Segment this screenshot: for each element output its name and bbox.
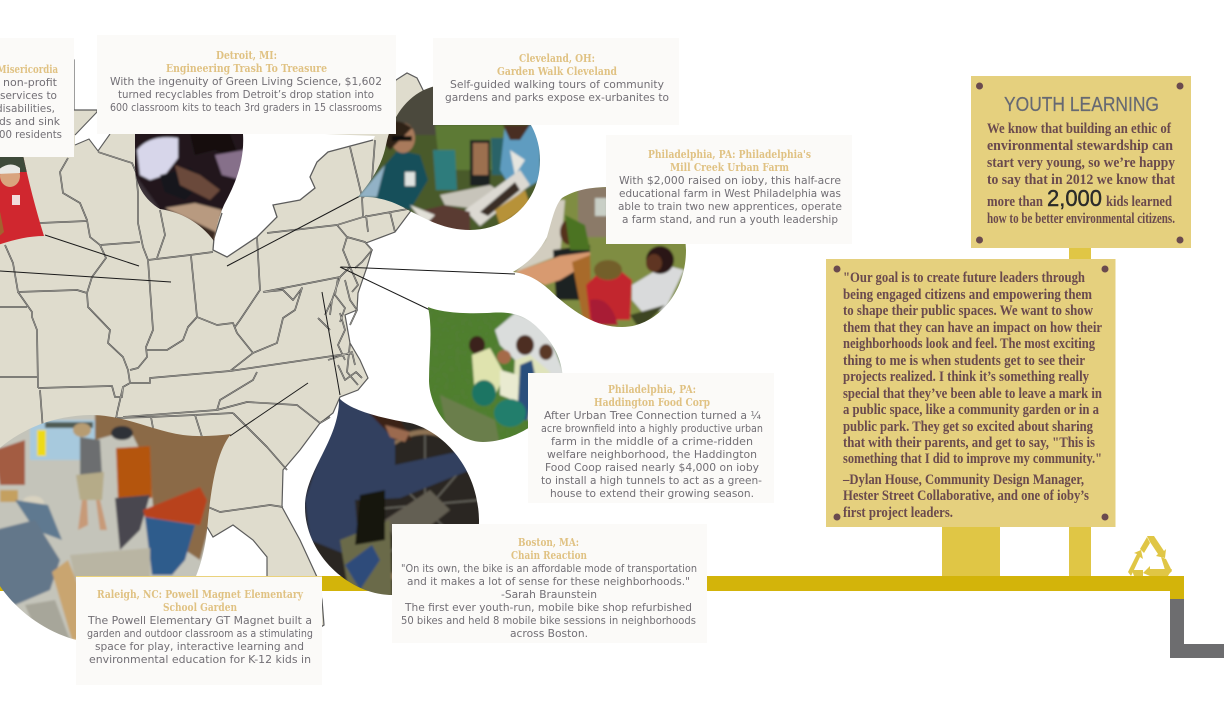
story card: Boston: 50 bikes and held 8 mobile bike sessions in neighborhoods [401,614,696,627]
icon: corner bolts [976,82,1184,244]
timeline bar: yellow and grey path [0,576,1224,658]
story card: Philadelphia Haddington: acre brownfield into a highly productive urban [541,422,763,435]
story card: Philadelphia Haddington: Food Coop raised nearly $4,000 on ioby [545,461,759,474]
story card: Boston: The first ever youth-run, mobile bike shop refurbished [404,601,692,614]
story card: Cleveland: Cleveland, OH: [519,52,595,65]
story card: Philadelphia Haddington: house to extend their growing season. [550,487,754,500]
text: quote: a public space, like a community garden or in a [843,402,1099,418]
text: attribution [842,472,1089,521]
text: quote: something that I did to improve my community." [843,451,1102,467]
panel: youth learning sign [971,76,1191,248]
text: quote: special that they’ve been able to leave a mark in [843,386,1103,402]
map of eastern United States [0,60,440,640]
story card: Boston: across Boston. [510,627,588,640]
story card: Cleveland [433,38,679,125]
story card: Boston: Chain Reaction [511,549,587,562]
story card: Misericordia: ds and sink [0,115,61,128]
photo: Cleveland garden walk [358,86,540,230]
story card: Detroit: 600 classroom kits to teach 3rd graders in 15 classrooms [110,101,382,114]
story card: Raleigh: The Powell Elementary GT Magnet built a [87,614,312,627]
story card: Philadelphia Mill Creek: educational farm in West Philadelphia was [619,187,841,200]
text: quote: projects realized. I think it’s something really [843,369,1089,385]
icon: corner bolts [834,266,1108,520]
story card: Boston [392,524,707,643]
text: quote [843,270,1103,467]
text: youth learning summary: more than [987,194,1044,210]
text: youth learning summary: to say that in 2012 we know that [987,172,1175,188]
story card: Philadelphia Mill Creek: Philadelphia, PA: Philadelphia's [648,148,811,161]
text: attribution: –Dylan House, Community Design Manager, [842,472,1084,488]
text: quote: them that they can have an impact on how their [843,320,1102,336]
photo: Boston Chain Reaction bike shop [305,398,479,595]
photo: Detroit recycled materials [135,134,244,241]
story card: Philadelphia Mill Creek: With $2,000 raised on ioby, this half-acre [619,174,841,187]
story card: Philadelphia Mill Creek: Mill Creek Urban Farm [670,161,789,174]
story card: Raleigh: space for play, interactive learning and [95,640,304,653]
text: youth learning summary [987,121,1175,227]
story card: Detroit: With the ingenuity of Green Living Science, $1,602 [110,75,382,88]
story card: Philadelphia Haddington: farm in the middle of a crime-ridden [551,435,753,448]
story card: Philadelphia Haddington: welfare neighborhood, the Haddington [547,448,757,461]
text: attribution: first project leaders. [843,505,953,521]
story card: Misericordia: non-profit [3,76,58,89]
story card: Raleigh: environmental education for K-12 kids in [89,653,311,666]
story card: Cleveland: Garden Walk Cleveland [497,65,617,78]
story card: Philadelphia Haddington: After Urban Tree Connection turned a ¼ [544,409,761,422]
story card: Boston: and it makes a lot of sense for these neighborhoods." [407,575,690,588]
heading: youth learning: YOUTH LEARNING [1004,94,1159,116]
story card: Boston: "On its own, the bike is an affordable mode of transportation [401,562,697,575]
story card: Philadelphia Haddington: to install a high tunnels to act as a green- [541,474,762,487]
story card: Cleveland: gardens and parks expose ex-urbanites to [445,91,669,104]
story card: Misericordia: services to [0,89,57,102]
story card: Raleigh: garden and outdoor classroom as a stimulating [87,627,313,640]
story card: Raleigh: School Garden [163,601,237,614]
text: youth learning summary: 2,000 [1047,185,1102,211]
story card: Philadelphia Haddington: Haddington Food Corp [594,396,710,409]
text: quote: to shape their public spaces. We want to show [843,303,1093,319]
story card: Raleigh [76,576,322,685]
text: quote: being engaged citizens and empowering them [843,287,1092,303]
panel: Dylan House quote sign [826,259,1116,527]
text: quote: thing to me is when students get to see their [843,353,1085,369]
story card: Philadelphia Mill Creek: a farm stand, and run a youth leadership [622,213,838,226]
text: youth learning summary: kids learned [1106,194,1173,210]
story card: Misericordia [0,38,74,157]
icon: recycling arrows [1128,536,1172,576]
story card: Misericordia: 00 residents [0,128,62,141]
text: youth learning summary: start very young, so we’re happy [987,155,1175,171]
story card: Philadelphia Mill Creek [606,135,852,244]
story card: Raleigh: Raleigh, NC: Powell Magnet Elementary [97,588,304,601]
text: quote: neighborhoods look and feel. The most exciting [843,336,1095,352]
photo: Philadelphia Mill Creek Urban Farm [513,187,686,327]
photo: Raleigh Powell Magnet school garden build [0,410,235,640]
text: attribution: Hester Street Collaborative, and one of ioby’s [843,488,1089,504]
text: youth learning summary: We know that building an ethic of [987,121,1172,137]
story card: Boston: Boston, MA: [518,536,579,549]
story card: Boston: -Sarah Braunstein [501,588,597,601]
photo: Philadelphia Haddington Food Corp [425,305,565,445]
story card: Philadelphia Haddington [528,373,774,503]
story card: Detroit: Detroit, MI: [216,49,277,62]
text: quote: "Our goal is to create future leaders through [843,270,1086,286]
story card: Philadelphia Mill Creek: able to train two new apprentices, operate [618,200,842,213]
leader lines from states to stories [0,196,515,436]
text: quote: that with their parents, and get to say, "This is [843,435,1095,451]
story card: Detroit: Engineering Trash To Treasure [166,62,327,75]
story card: Detroit: turned recyclables from Detroit’s drop station into [118,88,374,101]
story card: Philadelphia Haddington: Philadelphia, PA: [608,383,696,396]
text: youth learning summary: environmental stewardship can [987,138,1174,154]
text: quote: public park. They get so excited about sharing [843,419,1093,435]
story card: Cleveland: Self-guided walking tours of community [450,78,664,91]
sign posts [942,248,1091,576]
story card: Detroit [97,35,396,134]
photo: Misericordia volunteers [0,157,44,244]
